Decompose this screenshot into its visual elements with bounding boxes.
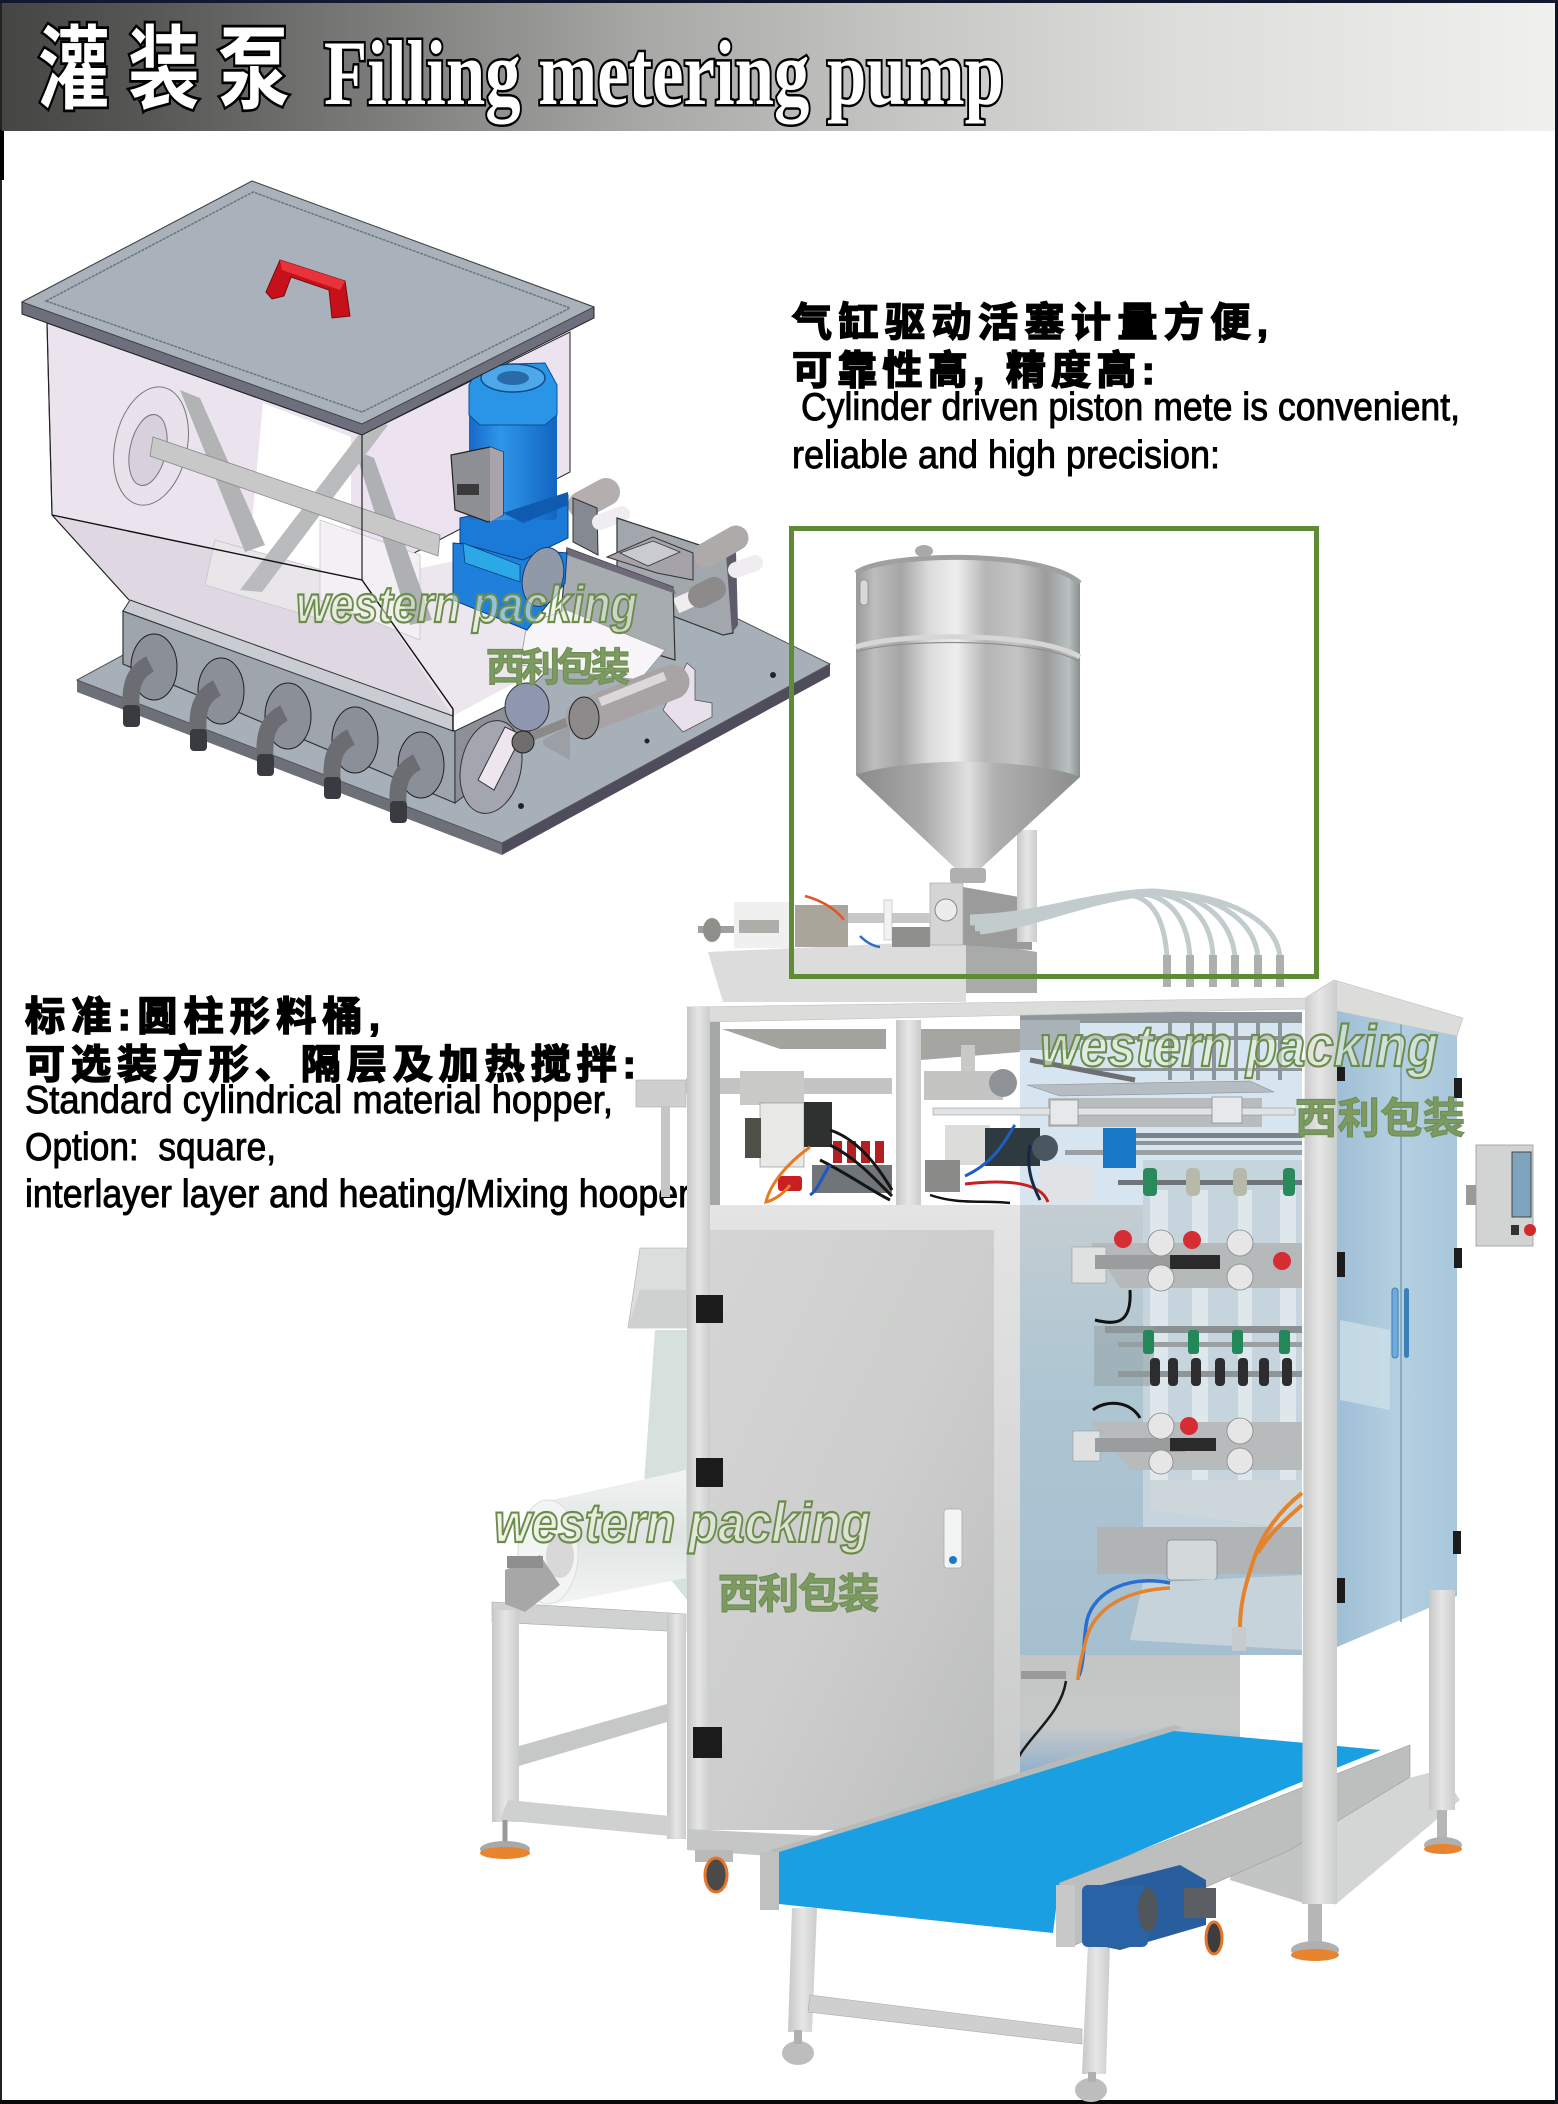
flange and hose 3 bbox=[257, 683, 311, 776]
label: Chinese, standard cylindrical hopper: 标准:圆柱形料桶, bbox=[25, 995, 380, 1039]
header band bbox=[0, 0, 1558, 131]
electrical valve block bbox=[745, 1102, 892, 1202]
glass hopper back and interior bbox=[47, 323, 570, 716]
green highlight frame bbox=[792, 528, 1316, 976]
pouch film strip bbox=[1118, 1160, 1302, 1538]
machine base rail bbox=[687, 1829, 1000, 1870]
label: Chinese, hopper options: 可选装方形、隔层及加热搅拌: bbox=[25, 1043, 636, 1087]
watermark 1: 西利包装 bbox=[486, 647, 630, 690]
blue gear motor bbox=[451, 363, 570, 630]
film rollers top bbox=[1143, 1168, 1295, 1196]
title: Chinese: 灌装泵 bbox=[38, 20, 290, 121]
flange and hose 5 bbox=[390, 732, 444, 823]
rollers station bbox=[1093, 1326, 1302, 1418]
rear grid bbox=[1080, 1020, 1302, 1080]
hopper tank bbox=[856, 545, 1080, 883]
watermark 2: western packing bbox=[1040, 1014, 1438, 1079]
title: English: Filling metering pump bbox=[324, 22, 1004, 124]
label: Chinese, high reliability and precision: 可靠性高, 精度高: bbox=[792, 349, 1155, 393]
conveyor back base bbox=[1230, 1770, 1460, 1905]
flange and hose 4 bbox=[324, 707, 378, 799]
inner machine panel bbox=[1020, 1205, 1302, 1655]
hopper lid and front edges bbox=[22, 181, 594, 731]
door lock bbox=[944, 1509, 962, 1568]
rear right foot bbox=[1424, 1810, 1462, 1854]
photo: packing machine bbox=[480, 528, 1536, 2102]
flange and hose 1 bbox=[123, 634, 177, 727]
illustration: metering pump CAD drawing bbox=[22, 181, 830, 855]
flange and hose 2 bbox=[190, 658, 244, 751]
film roll bbox=[505, 1470, 686, 1612]
rear right post bbox=[1429, 1590, 1455, 1810]
door hinges bbox=[1337, 1067, 1462, 1603]
cutter station and air hoses bbox=[1012, 1480, 1302, 1773]
hose fittings bbox=[1163, 955, 1284, 987]
base plate bbox=[77, 600, 830, 855]
label: English, standard hopper: Standard cylindrical material hopper, bbox=[25, 1079, 613, 1122]
right side blue panel bbox=[1337, 1011, 1462, 1647]
pump head base bbox=[708, 830, 1037, 1002]
front right post bbox=[1302, 980, 1337, 1904]
conveyor bbox=[760, 1725, 1410, 2102]
castor wheel left bbox=[695, 1850, 733, 1892]
label: Chinese, cylinder-driven piston: 气缸驱动活塞计量方便, bbox=[792, 301, 1268, 345]
rear mechanism plates and cylinders bbox=[560, 492, 755, 660]
upper opening contents bbox=[636, 1012, 1302, 1205]
film roll stand bbox=[480, 1602, 686, 1859]
clear filling hoses bbox=[970, 891, 1280, 957]
watermark 3 bbox=[494, 1491, 879, 1617]
cabinet door bbox=[693, 1230, 994, 1830]
label: English, cylinder-driven piston line 2: reliable and high precision: bbox=[792, 434, 1220, 477]
watermark 2 bbox=[1040, 1014, 1465, 1142]
watermark 3: 西利包装 bbox=[718, 1571, 879, 1617]
watermark 1: western packing bbox=[296, 576, 637, 634]
film sheet and hood bbox=[628, 1248, 687, 1600]
white slide block bbox=[520, 610, 665, 680]
conveyor end plates bbox=[760, 1852, 1075, 1947]
piston assembly bbox=[698, 896, 930, 948]
front right foot bbox=[1291, 1904, 1339, 1961]
watermark 1 bbox=[296, 576, 637, 690]
label: English, interlayer and heating option: interlayer layer and heating/Mixing hooper bbox=[25, 1173, 690, 1216]
lower pneumatic cylinder bbox=[505, 663, 712, 760]
conveyor side rail bbox=[1059, 1745, 1410, 1945]
conveyor drive motor bbox=[1082, 1865, 1222, 1954]
watermark 3: western packing bbox=[494, 1491, 870, 1554]
machine frame posts and beams bbox=[687, 980, 1463, 1843]
conveyor legs bbox=[782, 1908, 1110, 2102]
control panel bbox=[1466, 1145, 1536, 1246]
door frame bbox=[710, 1205, 1020, 1836]
lower inner panel bbox=[1018, 1654, 1240, 1774]
sealing station 1 bbox=[1072, 1230, 1302, 1322]
label: English, option square: Option: square, bbox=[25, 1126, 276, 1169]
label: English, cylinder-driven piston line 1: Cylinder driven piston mete is convenient, bbox=[801, 386, 1460, 429]
middle motor and wires bbox=[925, 1125, 1136, 1203]
conveyor rear rail bbox=[770, 1725, 1183, 1860]
door hinges bbox=[693, 1295, 723, 1758]
conveyor belt bbox=[779, 1731, 1381, 1933]
watermark 2: 西利包装 bbox=[1295, 1095, 1465, 1142]
red lid handle bbox=[266, 260, 350, 318]
sealing station 2 bbox=[1073, 1413, 1302, 1474]
trough with flanges and hoses bbox=[123, 600, 530, 823]
